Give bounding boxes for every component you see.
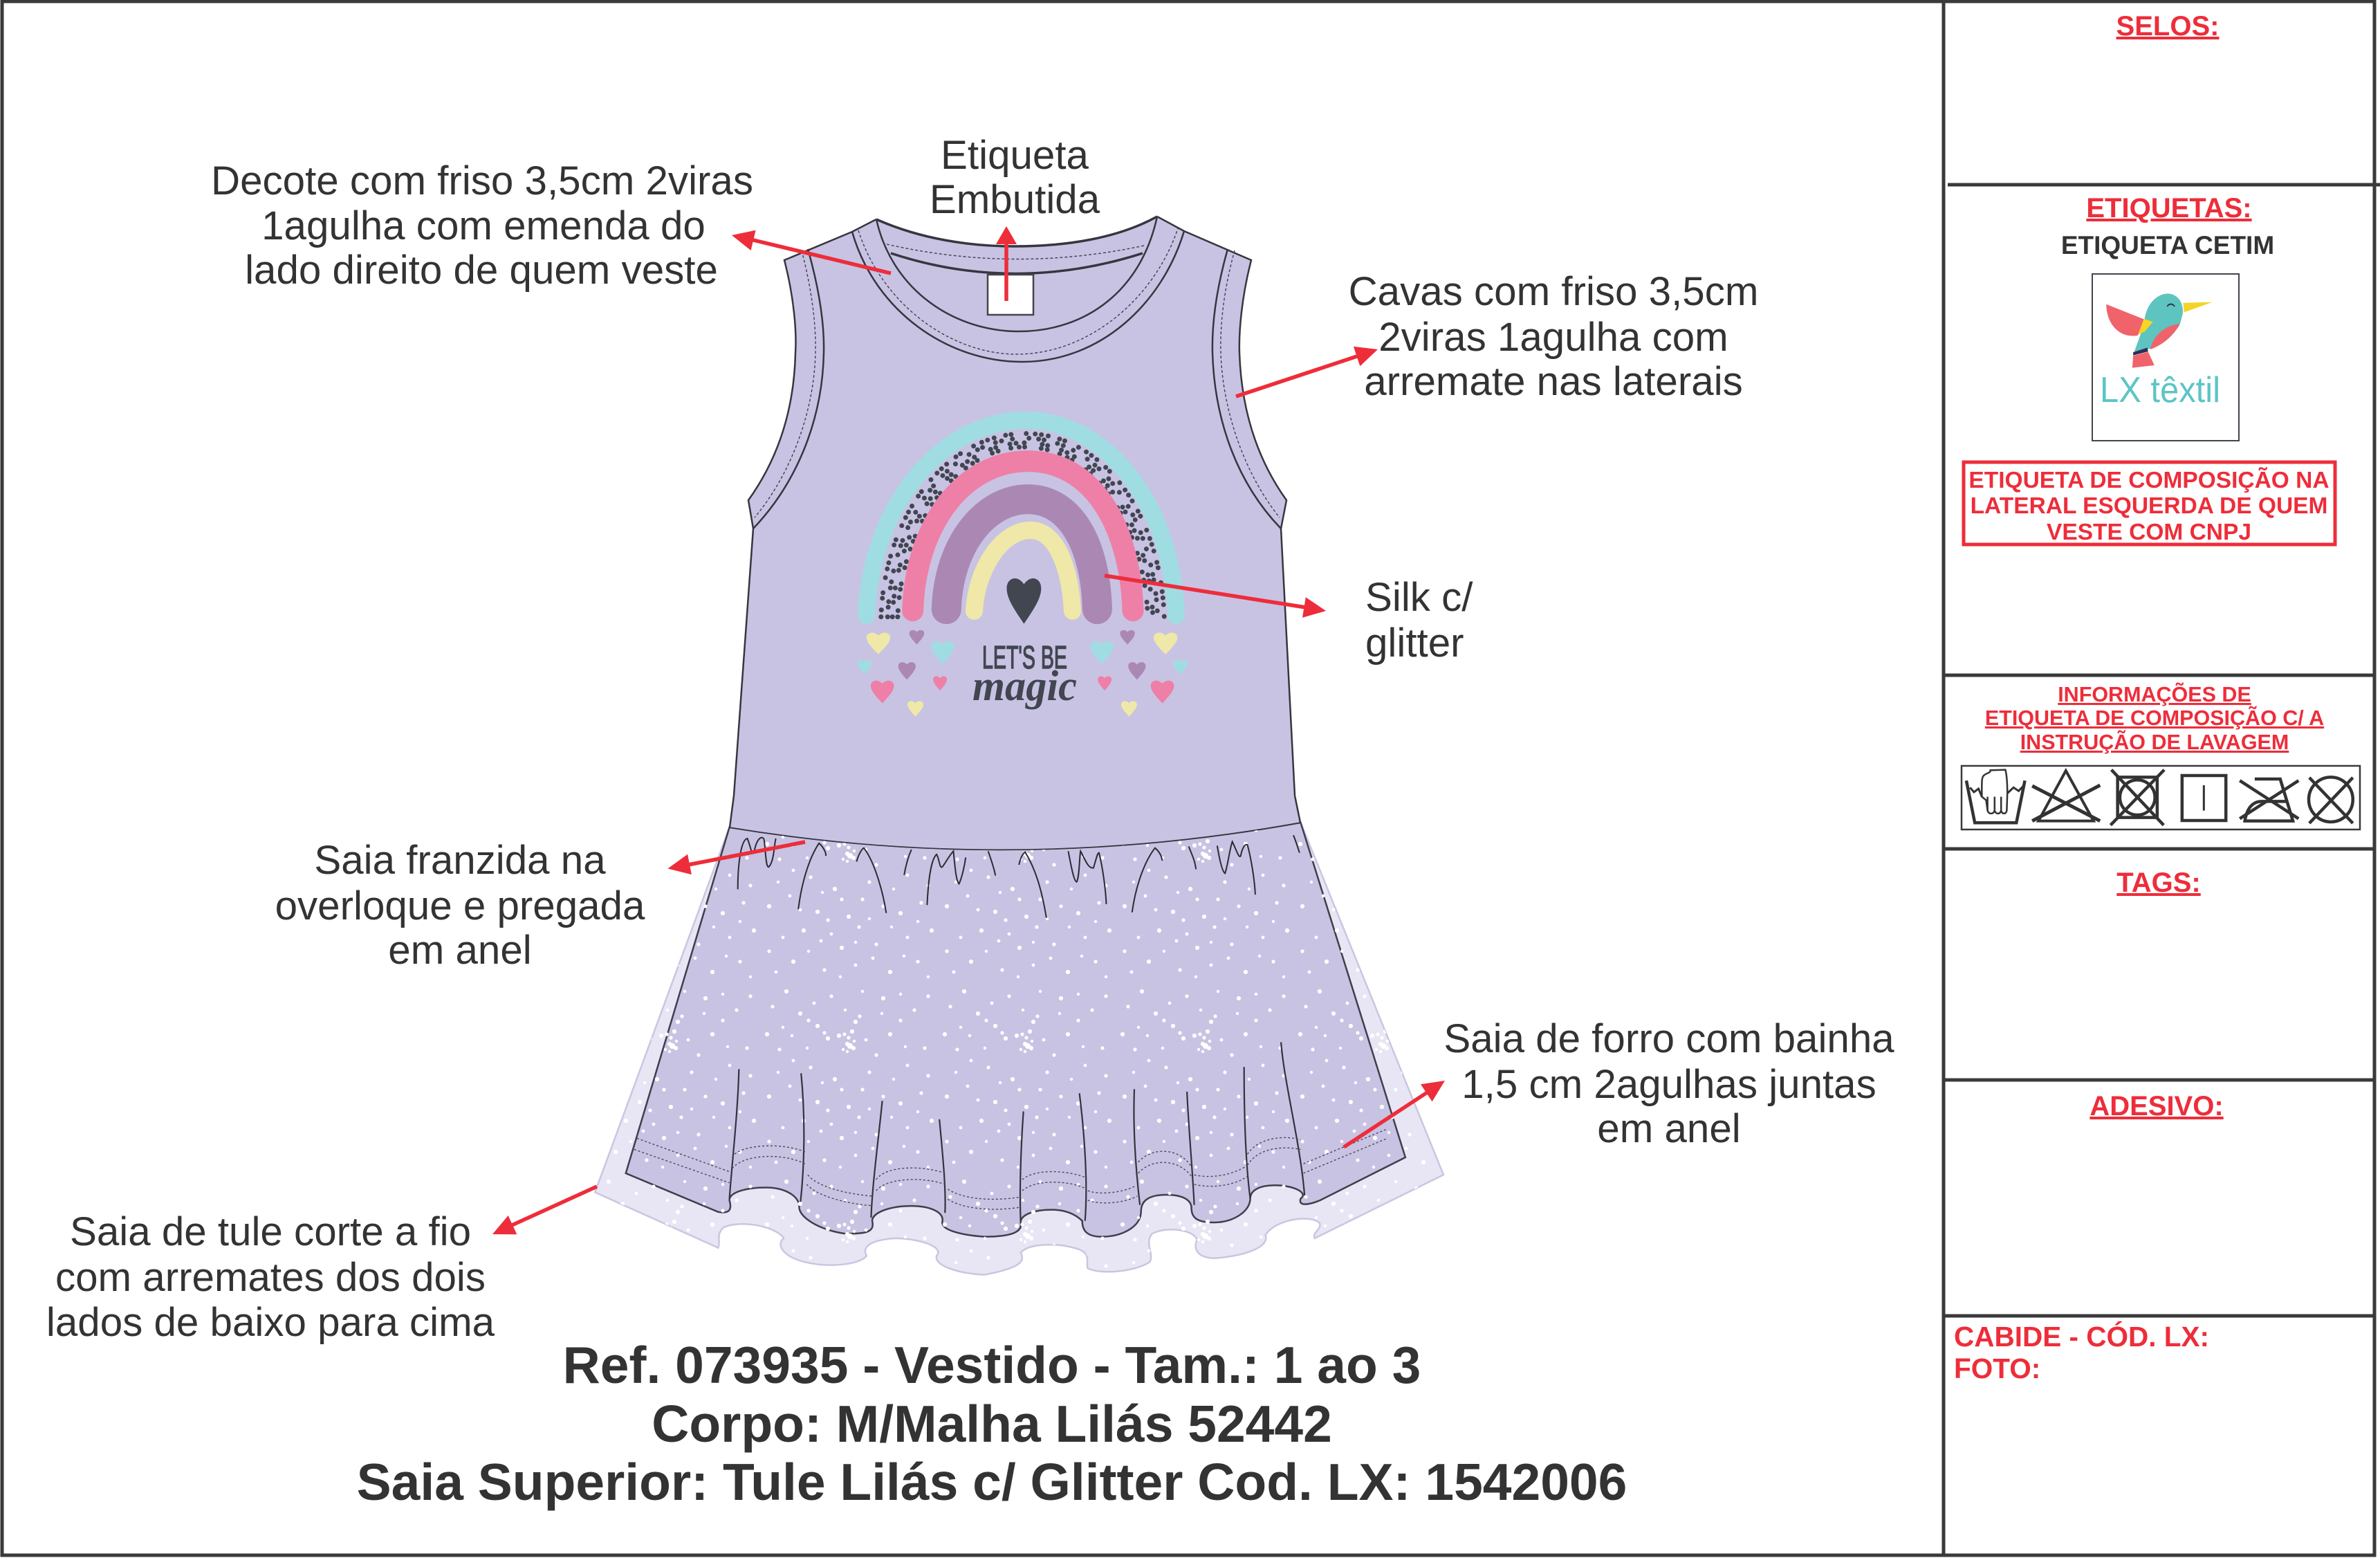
- product title: Corpo: M/Malha Lilás 52442: [652, 1395, 1332, 1453]
- callout text: saia de tule: Saia de tule corte a fio: [70, 1209, 471, 1254]
- icon: no dry clean: [2309, 777, 2353, 823]
- callout text: silk: glitter: [1365, 621, 1464, 666]
- dress illustration: [595, 217, 1443, 1275]
- callout text: decote: Decote com friso 3,5cm 2viras: [211, 158, 753, 203]
- lining skirt: [595, 823, 1443, 1275]
- panel: cabide e foto: CABIDE - CÓD. LX:: [1954, 1321, 2209, 1353]
- tulle over-skirt: [595, 823, 1443, 1275]
- callout text: saia de forro: 1,5 cm 2agulhas juntas: [1461, 1062, 1876, 1107]
- callout text: saia de tule: lados de baixo para cima: [46, 1300, 495, 1345]
- heading: instrucao de lavagem: ETIQUETA DE COMPOSIÇÃO C/ A: [1985, 706, 2324, 730]
- panel: adesivo: ADESIVO:: [2090, 1091, 2224, 1121]
- callout text: cavas: 2viras 1agulha com: [1378, 315, 1728, 360]
- gathers at waist: [738, 835, 1300, 918]
- hem folds: [730, 1042, 1304, 1221]
- neck label: [988, 275, 1033, 315]
- logo: LX textil: [2092, 274, 2239, 441]
- hem stitching: [634, 1129, 1387, 1209]
- icon: hand wash: [1966, 770, 2025, 823]
- callout: etiqueta de composicao: LATERAL ESQUERDA DE QUEM: [1971, 493, 2327, 519]
- callout text: saia franzida: Saia franzida na: [314, 838, 606, 883]
- callout text: decote: lado direito de quem veste: [245, 248, 718, 293]
- callout text: saia de tule: com arremates dos dois: [55, 1255, 486, 1300]
- product title: Saia Superior: Tule Lilás c/ Glitter Cod. LX: 1542006: [357, 1453, 1627, 1511]
- icon: no iron: [2240, 779, 2298, 821]
- rainbow print: [857, 420, 1188, 717]
- print slogan: [972, 639, 1077, 710]
- icon: no tumble dry: [2110, 770, 2164, 825]
- panel: informacoes de composicao: [1962, 681, 2360, 830]
- glitter sprinkles: [595, 823, 1443, 1275]
- arrow: saia franzida: [668, 842, 805, 874]
- callout text: saia franzida: em anel: [388, 928, 532, 973]
- callout: etiqueta de composicao: VESTE COM CNPJ: [2047, 520, 2251, 545]
- callout text: silk: Silk c/: [1365, 575, 1473, 620]
- arrow: saia de tule: [492, 1186, 597, 1234]
- icon: no bleach: [2032, 771, 2100, 821]
- callout text: decote: 1agulha com emenda do: [261, 203, 705, 248]
- callout text: cavas: Cavas com friso 3,5cm: [1349, 269, 1758, 314]
- panel: selos: SELOS:: [2116, 11, 2219, 42]
- arrow: saia de forro: [1344, 1081, 1445, 1147]
- callout text: saia de forro: em anel: [1597, 1106, 1741, 1151]
- callout text: cavas: arremate nas laterais: [1364, 359, 1743, 404]
- panel: etiquetas: [1964, 193, 2335, 545]
- heading: etiquetas: ETIQUETAS:: [2086, 193, 2252, 223]
- logo: LX textil: LX têxtil: [2100, 370, 2220, 410]
- arrow: cavas: [1236, 347, 1378, 396]
- arrow: etiqueta: [996, 226, 1017, 301]
- heading: instrucao de lavagem: INSTRUÇÃO DE LAVAGEM: [2020, 730, 2289, 754]
- hearts: [857, 578, 1188, 717]
- washing symbols: [1962, 766, 2360, 830]
- callout text: saia de forro: Saia de forro com bainha: [1443, 1016, 1894, 1061]
- arrow: silk: [1105, 576, 1326, 618]
- callout: etiqueta de composicao: [1964, 462, 2335, 545]
- icon: line dry: [2182, 776, 2226, 821]
- print slogan: LET'S BE: [982, 639, 1067, 675]
- print slogan: magic: [972, 663, 1077, 710]
- arrow: decote: [732, 230, 891, 273]
- bodice: [730, 217, 1300, 850]
- callout: etiqueta de composicao: ETIQUETA DE COMPOSIÇÃO NA: [1968, 467, 2330, 493]
- callout text: saia franzida: overloque e pregada: [275, 883, 645, 928]
- product title: Ref. 073935 - Vestido - Tam.: 1 ao 3: [563, 1336, 1421, 1394]
- panel: tags: TAGS:: [2116, 868, 2201, 898]
- callout text: etiqueta embutida: Etiqueta: [941, 133, 1089, 178]
- callout text: etiqueta embutida: Embutida: [930, 177, 1100, 222]
- heading: instrucao de lavagem: INFORMAÇÕES DE: [2058, 681, 2251, 706]
- panel: cabide e foto: FOTO:: [1954, 1353, 2040, 1384]
- subheading: etiqueta cetim: ETIQUETA CETIM: [2061, 231, 2274, 259]
